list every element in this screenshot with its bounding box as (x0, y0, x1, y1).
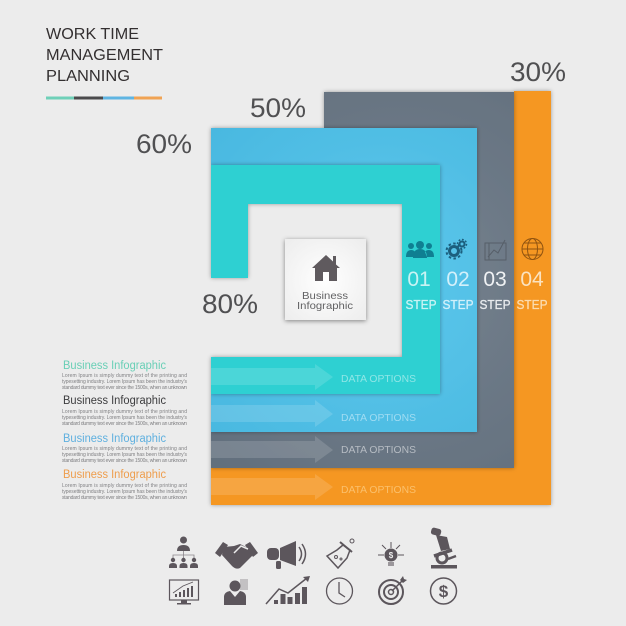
icon: growth chart (266, 576, 310, 604)
legend: dark: Business Infographic (63, 395, 166, 407)
band: teal 80% (211, 165, 440, 394)
band: orange 30% (211, 91, 551, 505)
percent labels: 60% (136, 129, 192, 159)
step labels: STEP (406, 298, 436, 312)
legend: orange (62, 469, 188, 501)
icon: idea bulb: $ (389, 551, 394, 560)
icon: dollar coin: $ (439, 582, 449, 601)
legend: teal: standard dummy text ever since the 1500s, when an unknown (62, 385, 187, 391)
legend: teal: Lorem Ipsum is simply dummy text of the printing and (62, 373, 187, 379)
legend: blue: Lorem Ipsum is simply dummy text of the printing and (62, 446, 187, 452)
percent labels (136, 57, 566, 319)
title: WORK TIME (46, 26, 139, 43)
title: PLANNING (46, 68, 130, 85)
percent labels: 80% (202, 289, 258, 319)
step numbers: 04 (520, 268, 544, 291)
title: MANAGEMENT (46, 47, 163, 64)
legend: blue: typesetting industry. Lorem Ipsum has been the industry's (62, 452, 188, 458)
icon: org chart (169, 536, 198, 568)
step numbers: 01 (407, 268, 431, 291)
icon: chart board (485, 240, 506, 260)
step labels (406, 298, 548, 312)
step labels: STEP (516, 298, 548, 312)
percent labels: 50% (250, 93, 306, 123)
icon: idea bulb (378, 542, 404, 566)
step numbers: 02 (446, 268, 470, 291)
legend: teal (62, 360, 188, 391)
legend: dark (62, 395, 188, 427)
center card (285, 239, 366, 320)
title underline (46, 96, 162, 100)
legend: dark: standard dummy text ever since the 1500s, when an unknown (62, 421, 187, 427)
legend text blocks (62, 360, 188, 501)
arrows (211, 364, 333, 500)
icon: dollar coin (430, 578, 456, 604)
step numbers (407, 268, 544, 291)
legend: blue (62, 433, 188, 464)
icon: megaphone (267, 541, 306, 569)
percent labels: 30% (510, 57, 566, 87)
icon: globe (522, 238, 543, 260)
icon: target (379, 576, 407, 604)
icon: clock (326, 578, 352, 604)
band: gray 50% (211, 92, 514, 468)
icon: flask (327, 539, 354, 568)
icon: handshake (215, 542, 258, 569)
icon: monitor chart (170, 580, 198, 604)
data option labels: DATA OPTIONS (341, 484, 416, 496)
data option labels: DATA OPTIONS (341, 373, 416, 385)
legend: orange: typesetting industry. Lorem Ipsum has been the industry's (62, 489, 188, 495)
icon: microscope (430, 527, 457, 568)
card label: Business (302, 290, 348, 302)
card label: Infographic (297, 300, 353, 312)
band: blue 60% (211, 128, 477, 432)
data option labels: DATA OPTIONS (341, 412, 416, 424)
legend: teal: Business Infographic (63, 360, 166, 372)
legend: orange: Business Infographic (63, 469, 166, 481)
legend: teal: typesetting industry. Lorem Ipsum has been the industry's (62, 379, 188, 385)
legend: dark: Lorem Ipsum is simply dummy text of the printing and (62, 409, 187, 415)
step numbers: 03 (483, 268, 507, 291)
data option labels (341, 373, 416, 496)
icon: house (312, 255, 340, 281)
legend: blue: standard dummy text ever since the 1500s, when an unknown (62, 458, 187, 464)
icon: gears (446, 240, 466, 258)
data option labels: DATA OPTIONS (341, 444, 416, 456)
icon: people (406, 241, 434, 258)
title (46, 26, 163, 85)
legend: blue: Business Infographic (63, 433, 166, 445)
legend: dark: typesetting industry. Lorem Ipsum has been the industry's (62, 415, 188, 421)
step labels: STEP (442, 298, 474, 312)
legend: orange: standard dummy text ever since the 1500s, when an unknown (62, 495, 187, 501)
card label (297, 290, 353, 312)
icon: businessman (224, 579, 248, 605)
step labels: STEP (480, 298, 510, 312)
icon row (169, 527, 457, 605)
legend: orange: Lorem Ipsum is simply dummy text of the printing and (62, 483, 187, 489)
